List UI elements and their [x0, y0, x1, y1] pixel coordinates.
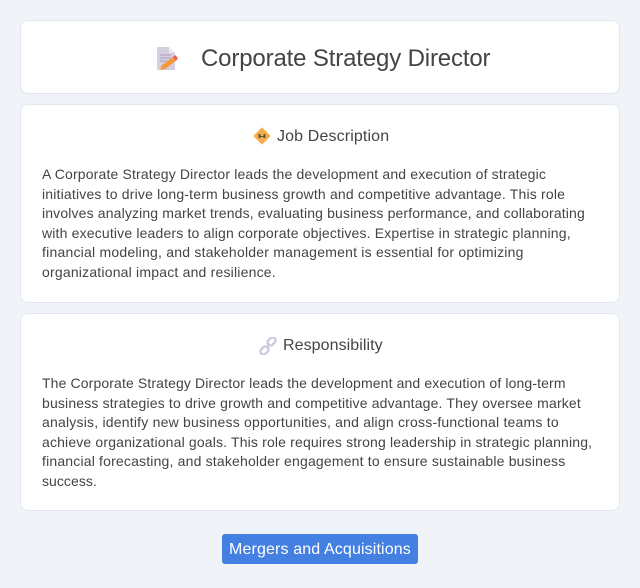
text block: responsibility: analysis, identify new business opportunities, and align cross-functional teams to	[42, 414, 559, 430]
text block: responsibility	[42, 375, 592, 488]
title: Corporate Strategy Director	[201, 45, 490, 72]
text block: job description: organizational impact and resilience.	[42, 264, 276, 280]
header card	[20, 20, 620, 94]
button: mergers and acquisitions: Mergers and Acquisitions	[229, 541, 411, 558]
button: mergers and acquisitions	[222, 534, 418, 564]
text block: job description: A Corporate Strategy Director leads the development and execution of strategic	[42, 166, 546, 182]
text block: responsibility: success.	[42, 472, 97, 488]
icon: chain link	[259, 337, 277, 355]
text block: job description: with executive leaders to align corporate objectives. Expertise in strategic planning,	[42, 224, 571, 240]
heading: job description: Job Description	[277, 128, 389, 145]
icon: diamond sign	[254, 128, 270, 144]
text block: job description: financial modeling, and stakeholder management is essential for optimizing	[42, 244, 524, 260]
text block: job description: involves analyzing market trends, evaluating business performance, and collaborating	[42, 205, 585, 221]
text block: responsibility: business strategies to drive growth and competitive advantage. They oversee market	[42, 394, 581, 410]
icon: document with pencil	[157, 47, 178, 70]
text block: responsibility: The Corporate Strategy Director leads the development and execution of long-term	[42, 375, 566, 391]
text block: job description: initiatives to drive long-term business growth and competitive advantage. This role	[42, 186, 565, 202]
panel: job description	[20, 104, 620, 303]
heading: responsibility: Responsibility	[283, 337, 383, 354]
text block: responsibility: achieve organizational goals. This role requires strong leadership in strategic planning,	[42, 434, 592, 450]
panel: responsibility	[20, 313, 620, 511]
text block: responsibility: financial forecasting, and stakeholder engagement to ensure sustainable business	[42, 453, 565, 469]
text block: job description	[42, 166, 585, 280]
